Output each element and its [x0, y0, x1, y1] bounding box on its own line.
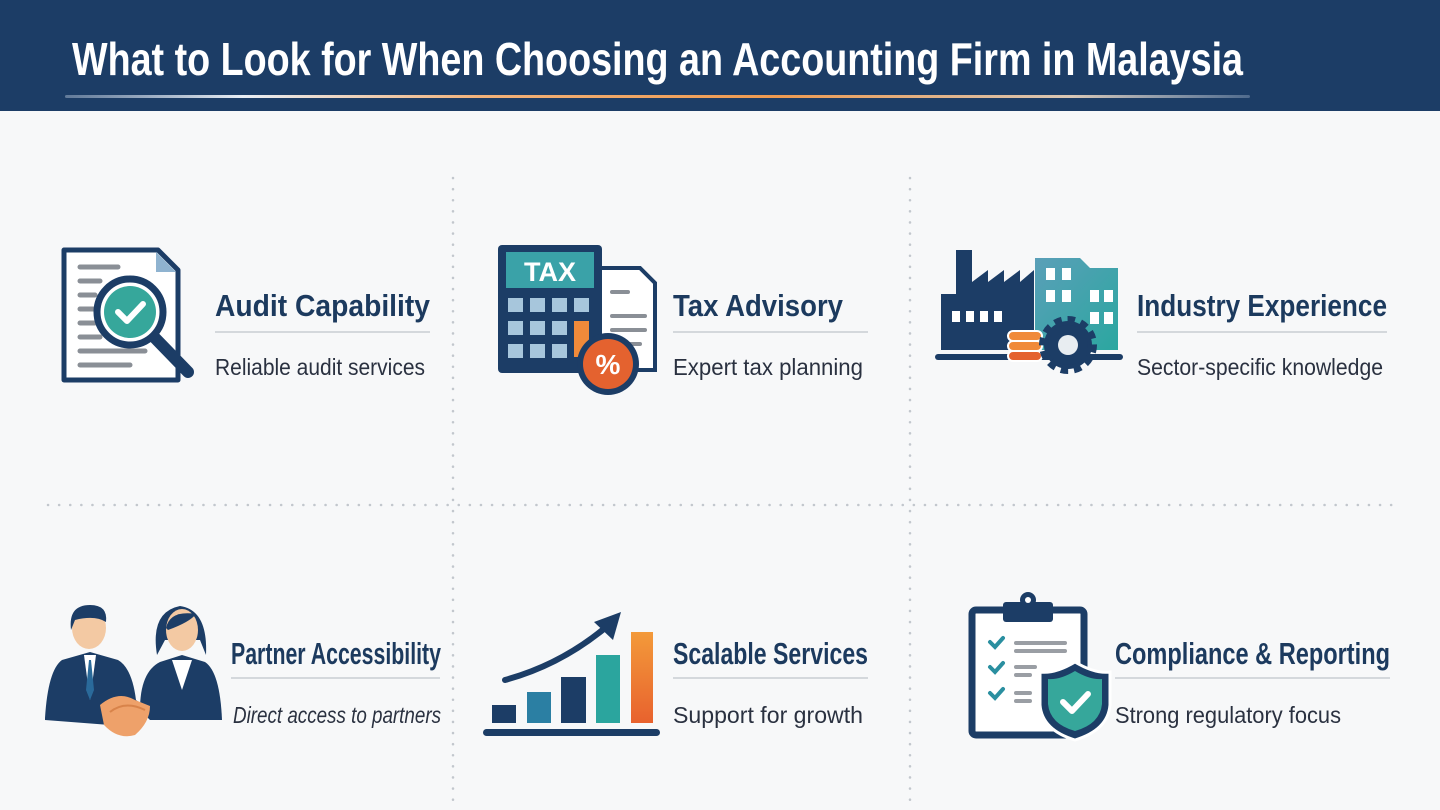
subtitle: Support for growth	[673, 702, 863, 728]
heading: Industry Experience	[1137, 288, 1387, 323]
heading: Tax Advisory	[673, 288, 844, 323]
heading: Scalable Services	[673, 636, 868, 671]
icon: clipboard with shield	[972, 592, 1110, 740]
subtitle: Direct access to partners	[233, 702, 441, 728]
subtitle: Expert tax planning	[673, 354, 863, 380]
icon: calculator: %	[596, 349, 621, 380]
heading: Audit Capability	[215, 288, 431, 323]
panel: scalable services	[483, 612, 868, 736]
icon: growth bar chart	[483, 612, 660, 736]
icon: two partners handshake	[45, 605, 222, 736]
icon: calculator	[498, 245, 655, 395]
panel: tax advisory	[498, 245, 868, 395]
icon: document magnifier	[64, 250, 188, 380]
subtitle: Sector-specific knowledge	[1137, 354, 1383, 380]
panel: compliance & reporting	[972, 592, 1390, 740]
panel: partner accessibility	[45, 605, 442, 736]
header banner	[0, 0, 1440, 111]
subtitle: Strong regulatory focus	[1115, 702, 1341, 728]
icon: calculator: TAX	[524, 257, 576, 287]
subtitle: Reliable audit services	[215, 354, 425, 380]
panel: audit capability	[64, 250, 431, 380]
icon: factory and gear	[935, 250, 1123, 369]
heading: Partner Accessibility	[231, 636, 442, 671]
panel: industry experience	[935, 250, 1387, 380]
